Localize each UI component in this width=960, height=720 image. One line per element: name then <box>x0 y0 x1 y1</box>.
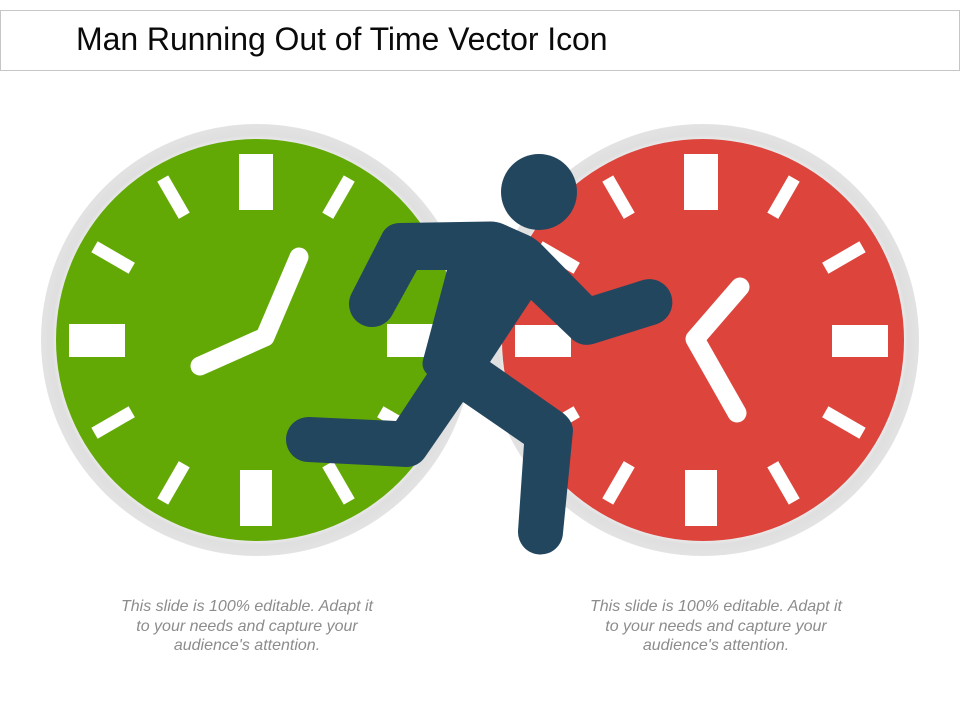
right caption <box>590 598 842 654</box>
left caption: audience's attention. <box>174 637 320 654</box>
title bar: Man Running Out of Time Vector Icon <box>76 21 608 57</box>
left caption: to your needs and capture your <box>136 618 358 634</box>
right caption: This slide is 100% editable. Adapt it <box>590 598 842 615</box>
running man <box>286 154 672 555</box>
left caption <box>121 598 374 654</box>
red clock <box>487 124 919 556</box>
clock hands <box>695 287 740 413</box>
clock hands <box>200 257 299 366</box>
title bar <box>0 10 960 71</box>
right caption: audience's attention. <box>643 637 789 654</box>
left caption: This slide is 100% editable. Adapt it <box>121 598 373 615</box>
green clock <box>41 124 473 556</box>
right caption: to your needs and capture your <box>605 618 827 634</box>
